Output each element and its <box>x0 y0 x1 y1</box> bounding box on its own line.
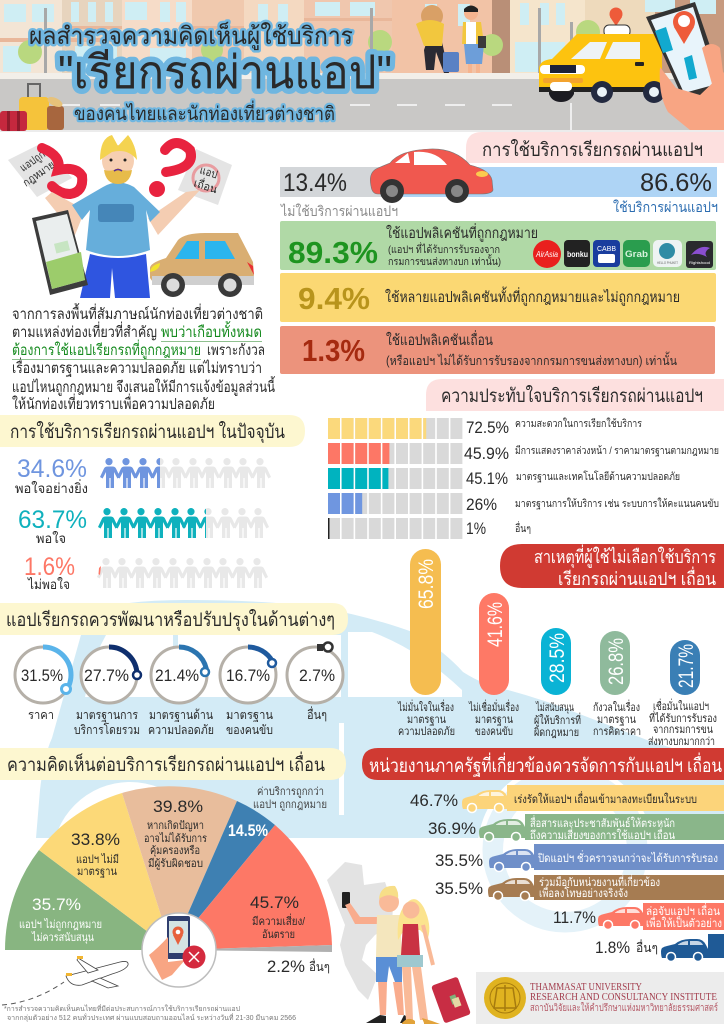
text block: field interview summary <box>12 303 275 413</box>
heading: current usage satisfaction: การใช้บริการเรียกรถผ่านแอปฯ ในปัจจุบัน <box>10 421 285 444</box>
taxi illustration <box>539 8 665 103</box>
bar: do not support violators: ผู้ให้บริการที่ <box>534 712 581 727</box>
ring: safety: 21.4% <box>155 666 199 685</box>
bar: safety doubt: ความปลอดภัย <box>398 726 455 738</box>
header street illustration <box>0 0 724 132</box>
travellers illustration <box>416 5 486 73</box>
panel: mixed apps 9.4% <box>280 273 716 322</box>
chart: opinion semicircle: 14.5% <box>228 821 268 840</box>
chart: opinion semicircle: มีความเสี่ยง/ <box>252 913 306 928</box>
app logos: CABB <box>597 246 616 253</box>
chart: satisfaction waffle bars: 1% <box>466 519 486 538</box>
chart: opinion semicircle: ค่าบริการถูกกว่า <box>257 786 324 798</box>
chart: very satisfied people row: พอใจอย่างยิ่ง <box>15 479 88 496</box>
illustration: tourist couple with suitcase <box>342 886 471 1024</box>
panel: Thammasat institute logo: THAMMASAT UNIVERSITY <box>530 982 642 993</box>
bar: seriously punish <box>435 874 724 900</box>
chart: reasons pill bars <box>397 549 717 748</box>
phone with map app <box>32 210 88 295</box>
ring: overall service: 27.7% <box>84 666 129 685</box>
bar: shut down temporarily <box>435 844 724 872</box>
panel: legal apps 89.3%: ใช้แอปพลิเคชันที่ถูกกฎหมาย <box>386 223 538 242</box>
split bar: usage share: 13.4% <box>283 169 347 197</box>
heading: reasons for not choosing illegal apps <box>500 544 724 589</box>
title: ผลสำรวจความคิดเห็นผู้ใช้บริการ <box>29 21 353 51</box>
app logos: Grab <box>625 249 649 259</box>
bar: pricing worry: กังวลในเรื่อง <box>593 699 640 714</box>
footnote <box>4 1004 296 1022</box>
bar: raise awareness: ถึงความเสี่ยงของการใช้แอปฯ เถื่อน <box>530 827 675 842</box>
chart: opinion semicircle: แอปฯ ไม่มี <box>76 853 119 866</box>
ring: other: อื่นๆ <box>307 706 327 722</box>
chart: opinion semicircle: 35.7% <box>32 895 81 914</box>
chart: opinion semicircle: อันตราย <box>262 929 295 941</box>
bar: enforce registration <box>410 785 724 812</box>
bar: safety doubt <box>397 549 455 738</box>
bar: trust in approved apps <box>648 640 717 748</box>
chart: very satisfied people row: 34.6% <box>17 455 87 483</box>
bar: trust in approved apps: 21.7% <box>675 644 698 688</box>
heading: opinions on illegal apps: ความคิดเห็นต่อบริการเรียกรถผ่านแอปฯ เถื่อน <box>7 751 325 776</box>
bar: do not support violators <box>534 628 581 739</box>
chart: dissatisfied people row: 1.6% <box>24 553 75 581</box>
chart: opinion semicircle: 45.7% <box>250 893 299 912</box>
ring: other: 2.7% <box>299 666 335 685</box>
heading: satisfaction <box>426 379 724 411</box>
panel: illegal apps 1.3% <box>280 326 715 374</box>
bar: pricing worry <box>593 631 641 738</box>
text block: field interview summary: เพราะกังวล <box>207 342 265 359</box>
bar: trust in approved apps: จากกรมการขน <box>653 724 713 736</box>
icon: hand, phone and rejected pin <box>142 913 216 987</box>
bar: pricing worry: 26.8% <box>605 638 628 685</box>
chart: satisfied people row <box>19 508 269 543</box>
app logos: HELLO PHUKET <box>657 261 679 265</box>
card: legal app: กฎหมาย <box>21 159 57 189</box>
bar: raise awareness: สื่อสารและประชาสัมพันธ์ให้ตระหนัก <box>530 815 675 830</box>
ring: safety <box>148 647 214 737</box>
bar: shut down temporarily: 35.5% <box>435 851 483 870</box>
bar: driver distrust: มาตรฐาน <box>475 714 513 726</box>
split bar: usage share: 86.6% <box>640 169 712 197</box>
card: legal app <box>8 143 72 197</box>
bar: raise awareness: 36.9% <box>428 819 476 838</box>
panel: mixed apps 9.4%: 9.4% <box>298 281 370 316</box>
heading: improvement areas <box>0 603 348 635</box>
panel: legal apps 89.3%: กรมการขนส่งทางบก เท่านั้น) <box>388 254 501 268</box>
bar: trust in approved apps: เชื่อมั่นในแอปฯ <box>653 698 709 713</box>
chart: opinion semicircle: 33.8% <box>71 830 120 849</box>
chart: opinion semicircle: อื่นๆ <box>309 958 330 974</box>
ring: overall service: มาตรฐานการ <box>76 708 138 722</box>
card: illegal app: เถื่อน <box>192 175 220 196</box>
panel: legal apps 89.3%: 89.3% <box>288 235 378 270</box>
app logos: bonku <box>567 250 588 259</box>
panel: legal apps 89.3% <box>280 221 716 270</box>
chart: opinion semicircle: 2.2% <box>267 957 305 976</box>
ring: driver: 16.7% <box>226 666 270 685</box>
text block: field interview summary: ต้องการใช้แอปเรียกรถที่ถูกกฎหมาย <box>12 339 201 359</box>
bar: raise awareness <box>428 814 724 842</box>
heading: improvement areas: แอปเรียกรถควรพัฒนาหรือปรับปรุงในด้านต่างๆ <box>6 609 335 632</box>
panel: Thammasat institute logo <box>476 972 724 1024</box>
chart: opinion semicircle: แอปฯ ถูกกฎหมาย <box>253 799 327 811</box>
split bar: usage share: ไม่ใช้บริการผ่านแอปฯ <box>280 203 398 219</box>
icon: university seal <box>484 977 526 1019</box>
chart: opinion semicircle: แอปฯ ไม่ถูกกฎหมาย <box>19 918 102 931</box>
card: illegal app: แอป <box>198 164 219 181</box>
chart: opinion semicircle: มาตรฐาน <box>77 866 117 878</box>
bar: sting operation: 11.7% <box>553 908 596 927</box>
bar: seriously punish: 35.5% <box>435 879 483 898</box>
chart: satisfaction waffle bars: 45.1% <box>466 469 508 488</box>
chart: satisfaction waffle bars: อื่นๆ <box>515 521 531 535</box>
bar: do not support violators: ผิดกฎหมาย <box>534 727 579 739</box>
app logos: AirAsia <box>535 250 558 259</box>
panel: legal apps 89.3%: (แอปฯ ที่ได้รับการรับรองจาก <box>388 242 500 256</box>
chart: dissatisfied people row: ไม่พอใจ <box>27 576 70 592</box>
bar: driver distrust: ไม่เชื่อมั่นเรื่อง <box>468 699 519 714</box>
background: large pale blue car silhouette <box>36 600 724 938</box>
bar: do not support violators: 28.5% <box>546 633 569 683</box>
bar: safety doubt: มาตรฐาน <box>407 714 446 726</box>
app logos: Rightshood <box>689 260 710 265</box>
bar: pricing worry: มาตรฐาน <box>597 714 636 726</box>
bar: driver distrust <box>468 593 519 738</box>
bar: other <box>595 934 724 962</box>
bar: enforce registration: 46.7% <box>410 791 458 810</box>
text block: field interview summary: ตามแหล่งท่องเที่ยวที่สำคัญ <box>12 321 157 341</box>
chart: improvement ring gauges <box>15 642 343 737</box>
chart: satisfaction waffle bars: 72.5% <box>466 418 509 437</box>
icon: red car <box>370 149 493 203</box>
chart: dissatisfied people row <box>24 553 268 592</box>
chart: satisfaction waffle bars: 26% <box>466 495 497 514</box>
chart: satisfaction waffle bars <box>328 417 719 539</box>
ring: driver: ของคนขับ <box>226 723 273 737</box>
title <box>29 21 392 125</box>
chart: satisfied people row: 63.7% <box>18 506 87 534</box>
heading: app usage <box>466 132 724 163</box>
split bar: usage share <box>280 167 718 219</box>
chart: satisfaction waffle bars: 45.9% <box>464 444 509 463</box>
panel: mixed apps 9.4%: ใช้หลายแอปพลิเคชันทั้งที่ถูกกฎหมายและไม่ถูกกฎหมาย <box>385 286 680 306</box>
chart: satisfaction waffle bars: ความสะดวกในการเรียกใช้บริการ <box>515 417 642 430</box>
footnote: จากกลุ่มตัวอย่าง 512 คนทั่วประเทศ ผ่านแบบสอบถามออนไลน์ ระหว่างวันที่ 21-30 มีนาคม 2566 <box>7 1013 296 1022</box>
icon: airplane with dashed trail <box>2 956 128 1005</box>
app logos <box>533 240 713 268</box>
hand holding phone with map <box>646 2 724 130</box>
text block: field interview summary: ให้นักท่องเที่ยวทราบเพื่อความปลอดภัย <box>12 393 215 413</box>
text block: field interview summary: จากการลงพื้นที่สัมภาษณ์นักท่องเที่ยวต่างชาติ <box>12 303 263 323</box>
chart: satisfaction waffle bars: มาตรฐานและเทคโนโลยีด้านความปลอดภัย <box>516 470 680 483</box>
bar: driver distrust: ของคนขับ <box>475 726 513 738</box>
chart: opinion semicircle: อาจไม่ได้รับการ <box>144 832 207 845</box>
bar: safety doubt: 65.8% <box>415 559 438 609</box>
ring: safety: ความปลอดภัย <box>148 723 214 737</box>
chart: very satisfied people row <box>15 458 271 493</box>
chart: opinion semicircle: มีผู้รับผิดชอบ <box>148 857 203 870</box>
bar: safety doubt: ไม่มั่นใจในเรื่อง <box>397 699 454 714</box>
text block: field interview summary: พบว่าเกือบทั้งหมด <box>161 321 262 341</box>
ring: price <box>15 647 71 722</box>
title: "เรียกรถผ่านแอป" <box>58 46 392 98</box>
ring: safety: มาตรฐานด้าน <box>149 708 213 722</box>
chart: opinion semicircle: 39.8% <box>153 797 203 816</box>
ring: driver: มาตรฐาน <box>226 708 273 722</box>
heading: government agencies <box>362 748 724 780</box>
ring: price: ราคา <box>28 708 54 722</box>
panel: illegal apps 1.3%: ใช้แอปพลิเคชันเถื่อน <box>386 330 493 349</box>
heading: current usage satisfaction <box>0 415 305 447</box>
chart: satisfied people row: พอใจ <box>36 530 66 546</box>
chart: opinion semicircle: คุ้มครองหรือ <box>150 844 200 857</box>
icon: question marks <box>42 143 191 194</box>
heading: opinions on illegal apps <box>0 748 346 780</box>
card: legal app: แอปถูก <box>18 149 48 174</box>
bar: seriously punish: เพื่อลงโทษอย่างจริงจัง <box>539 885 628 900</box>
chart: opinion semicircle: หากเกิดปัญหา <box>147 820 204 832</box>
card: illegal app <box>178 149 232 205</box>
text block: field interview summary: เรื่องมาตรฐานและความปลอดภัย แต่ไม่ทราบว่า <box>12 357 262 377</box>
bar: sting operation <box>553 903 724 930</box>
footnote: *การสำรวจความคิดเห็นคนไทยที่มีต่อประสบการณ์การใช้บริการเรียกรถผ่านแอป <box>4 1004 241 1013</box>
panel: illegal apps 1.3%: 1.3% <box>302 333 365 368</box>
ring: other <box>287 642 343 722</box>
bar: driver distrust: 41.6% <box>484 602 507 647</box>
bar: seriously punish: ร่วมมือกับหน่วยงานที่เกี่ยวข้อง <box>539 874 660 889</box>
chart: opinion semicircle <box>5 786 332 976</box>
panel: illegal apps 1.3%: (หรือแอปฯ ไม่ได้รับการรับรองจากกรมการขนส่งทางบก) เท่านั้น <box>386 351 677 368</box>
text block: field interview summary: แอปไหนถูกกฎหมาย จึงเสนอให้มีการแจ้งข้อมูลส่วนนี้ <box>12 376 275 396</box>
chart: opinion semicircle: ไม่ควรสนับสนุน <box>31 931 94 944</box>
bar: other: อื่นๆ <box>636 939 658 955</box>
chart: government action car bars <box>410 785 724 962</box>
luggage illustration <box>0 84 64 131</box>
ring: price: 31.5% <box>21 666 63 685</box>
illustration: confused man choosing apps <box>8 135 254 298</box>
ring: driver <box>220 647 276 737</box>
bar: pricing worry: การคิดราคา <box>593 726 641 738</box>
ring: overall service <box>74 647 141 737</box>
title: ของคนไทยและนักท่องเที่ยวต่างชาติ <box>74 100 335 125</box>
bar: other: 1.8% <box>595 938 630 957</box>
brown car <box>150 233 254 297</box>
bar: do not support violators: ไม่สนับสนุน <box>535 701 574 714</box>
ring: overall service: บริการโดยรวม <box>74 722 140 737</box>
illustration: Thailand map <box>327 862 393 1000</box>
